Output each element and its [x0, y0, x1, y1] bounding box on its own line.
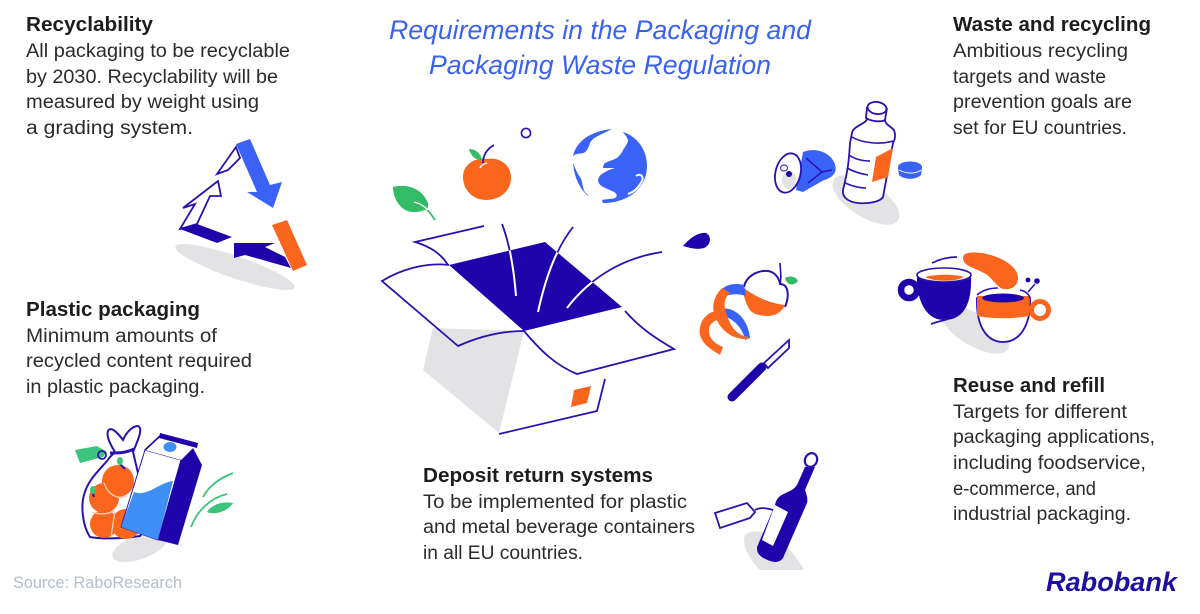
navy cup — [901, 282, 917, 298]
text block: recyclability: All packaging to be recyclable — [26, 41, 290, 62]
text block: recyclability: a grading system. — [26, 118, 193, 139]
icon: wine bottle with tag — [715, 451, 819, 570]
icon: leaf — [393, 186, 435, 220]
text block: reuse and refill: Targets for different — [953, 402, 1128, 423]
text block: deposit return systems — [423, 465, 695, 564]
icon: apple — [463, 145, 511, 200]
text block: deposit return systems: To be implemented for plastic — [423, 492, 687, 513]
bag — [82, 426, 145, 538]
logo: Rabobank: Rabobank — [1046, 567, 1179, 597]
source note: Source: RaboResearch — [13, 574, 182, 592]
text block: waste and recycling: Ambitious recycling — [953, 41, 1128, 62]
droplets — [1026, 278, 1030, 282]
icon: open cardboard box — [382, 224, 674, 434]
price tag — [75, 446, 107, 463]
text block: deposit return systems: and metal beverage containers — [423, 517, 695, 538]
icon: ring — [521, 128, 531, 138]
text block: reuse and refill: e-commerce, and — [953, 479, 1096, 500]
text block: plastic packaging: recycled content required — [26, 351, 252, 372]
text block: deposit return systems: Deposit return systems — [423, 465, 653, 487]
icon: peeled apple and knife — [700, 263, 798, 397]
text block: plastic packaging: Minimum amounts of — [26, 326, 218, 347]
icon: navy drop — [683, 233, 710, 249]
text block: waste and recycling: prevention goals are — [953, 92, 1132, 113]
icon: recycling arrows — [172, 139, 307, 298]
text block: reuse and refill: Reuse and refill — [953, 375, 1105, 397]
text block: plastic packaging — [26, 299, 252, 398]
title — [389, 15, 812, 80]
icon: plastic bottle, crushed can and cap — [771, 101, 922, 235]
text block: waste and recycling — [953, 14, 1151, 139]
text block: reuse and refill: packaging applications, — [953, 427, 1155, 448]
text block: recyclability: Recyclability — [26, 14, 154, 36]
text block: waste and recycling: targets and waste — [953, 67, 1106, 88]
text block: reuse and refill: industrial packaging. — [953, 504, 1131, 525]
text block: reuse and refill — [953, 375, 1155, 525]
icon: bag of oranges and milk carton — [75, 426, 233, 568]
text block: recyclability — [26, 14, 290, 139]
bottle — [843, 119, 895, 203]
text block: deposit return systems: in all EU countries. — [423, 543, 583, 564]
text block: plastic packaging: Plastic packaging — [26, 299, 200, 321]
icon: coffee cups — [901, 253, 1048, 363]
orange splash — [963, 253, 1018, 289]
text block: reuse and refill: including foodservice, — [953, 453, 1146, 474]
crushed can — [796, 150, 836, 192]
title: Requirements in the Packaging and — [389, 15, 812, 45]
text block: plastic packaging: in plastic packaging. — [26, 377, 205, 398]
text block: recyclability: measured by weight using — [26, 92, 259, 113]
icon: globe — [573, 129, 647, 203]
text block: waste and recycling: Waste and recycling — [953, 14, 1151, 36]
title: Packaging Waste Regulation — [429, 50, 771, 80]
bottle cap — [898, 167, 922, 179]
white cup with orange band — [977, 298, 1030, 342]
text block: waste and recycling: set for EU countries. — [953, 118, 1127, 139]
green motion lines and leaf — [191, 473, 233, 527]
text block: recyclability: by 2030. Recyclability will be — [26, 67, 278, 88]
carton — [121, 450, 181, 540]
